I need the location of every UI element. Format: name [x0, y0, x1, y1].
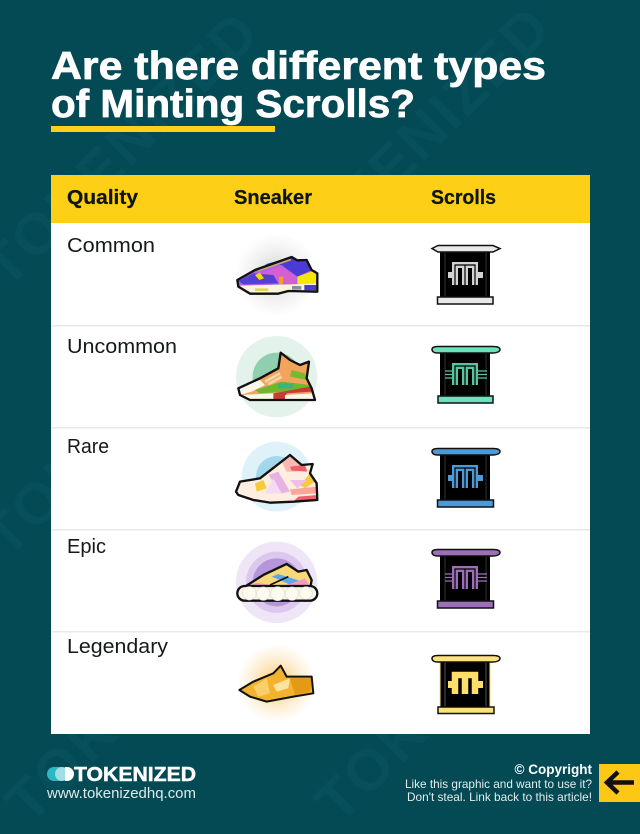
- row labels: Common: [67, 235, 155, 257]
- text: TOKENIZED: [303, 534, 605, 834]
- icon: logo pill: [47, 767, 74, 781]
- table header: [51, 175, 590, 223]
- icon: uncommon scroll: [432, 346, 500, 403]
- footer url: www.tokenizedhq.com: [46, 785, 196, 802]
- row labels: Epic: [67, 536, 106, 558]
- icon: uncommon sneaker: [236, 336, 317, 417]
- title: [51, 45, 546, 126]
- copyright note: Don't steal. Link back to this article!: [407, 790, 592, 804]
- icon: common sneaker: [235, 233, 318, 317]
- title: of Minting Scrolls?: [51, 83, 415, 126]
- icon: rare sneaker: [236, 442, 317, 512]
- table header: Scrolls: [431, 187, 496, 209]
- row labels: Uncommon: [67, 336, 177, 358]
- text: TOKENIZED: [0, 534, 295, 834]
- icon: legendary sneaker: [237, 644, 316, 723]
- copyright note: [405, 762, 592, 804]
- text: TOKENIZED: [303, 308, 605, 609]
- row labels: Legendary: [67, 636, 168, 658]
- footer logo: TOKENIZED: [74, 764, 196, 786]
- table header: Quality: [67, 187, 139, 209]
- panel: table: [51, 175, 590, 734]
- icon: epic scroll: [432, 550, 500, 608]
- yellow arrow box: [599, 764, 640, 802]
- icon: rare scroll: [432, 448, 500, 507]
- icon: legendary scroll: [432, 656, 500, 714]
- icon: epic sneaker: [236, 542, 317, 623]
- title underline: [51, 126, 275, 132]
- title: Are there different types: [51, 45, 546, 88]
- row labels: [67, 235, 177, 658]
- icon: common scroll: [432, 246, 500, 304]
- table header: Sneaker: [234, 187, 312, 209]
- copyright note: Like this graphic and want to use it?: [405, 777, 592, 791]
- copyright note: © Copyright: [515, 762, 592, 777]
- row labels: Rare: [67, 436, 109, 458]
- text: TOKENIZED: [263, 0, 565, 294]
